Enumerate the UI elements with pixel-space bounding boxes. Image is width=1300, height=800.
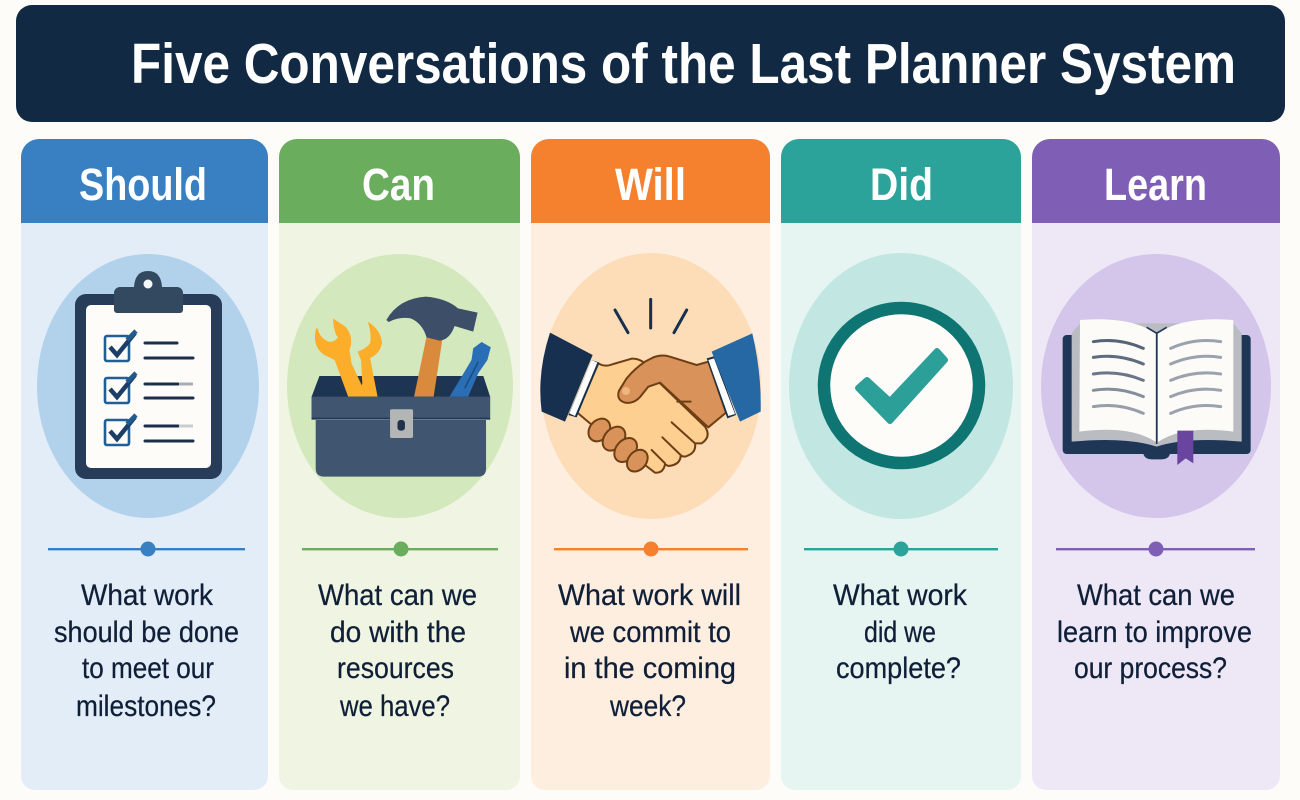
icon: toolbox (287, 254, 513, 518)
icon: check mark circle (789, 253, 1013, 519)
divider: Learn (1056, 542, 1255, 556)
heading: Learn (1032, 139, 1280, 223)
heading: Can (279, 139, 520, 223)
divider: Can (302, 542, 498, 556)
divider: Did (804, 542, 998, 556)
heading: Will: Will (615, 159, 686, 210)
title banner (16, 5, 1285, 122)
question: Learn: our process? (1074, 652, 1227, 685)
divider: Will (554, 542, 748, 556)
panel: Should (21, 139, 268, 790)
question: Will: in the coming (564, 652, 736, 685)
divider: Should (48, 542, 245, 556)
heading: Learn: Learn (1104, 159, 1207, 210)
panel: Did (781, 139, 1021, 790)
heading: Should (21, 139, 268, 223)
heading: Will (531, 139, 770, 223)
heading: Can: Can (362, 159, 435, 210)
question: Will: week? (609, 690, 686, 723)
question: Learn: What can we (1077, 579, 1235, 612)
heading: Did (781, 139, 1021, 223)
question: Can: do with the (330, 616, 466, 649)
panel: Can (279, 139, 520, 790)
panel: Learn (1032, 139, 1280, 790)
question: Should: should be done (54, 616, 239, 649)
question: Will: What work will (558, 579, 741, 612)
panel: Will (531, 139, 770, 790)
question: Should (54, 579, 239, 723)
question: Should: milestones? (76, 690, 216, 723)
question: Learn: learn to improve (1057, 616, 1252, 649)
question: Should: What work (81, 579, 213, 612)
heading: Did: Did (870, 159, 933, 210)
question: Did: What work (833, 579, 967, 612)
heading: Should: Should (79, 159, 207, 210)
question: Can (318, 579, 477, 723)
question: Learn (1057, 579, 1252, 685)
question: Can: What can we (318, 579, 477, 612)
question: Can: we have? (339, 690, 450, 723)
icon: open book (1041, 254, 1271, 518)
icon: handshake (540, 253, 761, 519)
icon: clipboard checklist (37, 254, 259, 518)
question: Will (558, 579, 741, 723)
question: Did: did we (864, 616, 936, 649)
question: Did (833, 579, 967, 685)
question: Can: resources (337, 652, 454, 685)
question: Should: to meet our (82, 652, 214, 685)
question: Did: complete? (836, 652, 961, 685)
question: Will: we commit to (569, 616, 731, 649)
